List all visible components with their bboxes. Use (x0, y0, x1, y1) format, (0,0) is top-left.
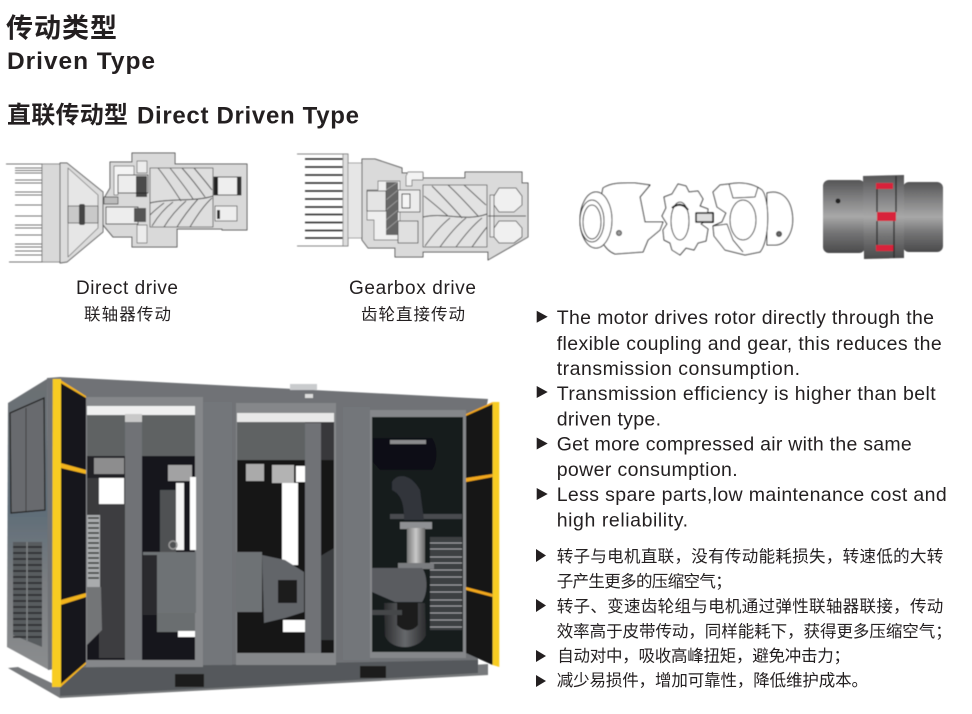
left door (52, 379, 86, 687)
caption: direct drive: 联轴器传动 (84, 305, 171, 324)
section heading: Direct Driven Type: 直联传动型 (7, 102, 128, 129)
bullets: English feature list: The motor drives rotor directly through the (557, 307, 934, 329)
title: English: Driven Type (7, 48, 155, 75)
bullets: Chinese feature list: 转子与电机直联，没有传动能耗损失，转速低的大转 (557, 547, 943, 566)
caption: direct drive: Direct drive (76, 278, 178, 299)
bullets: English feature list: high reliability. (557, 510, 688, 532)
photo: compressor cabinet with open doors (7, 377, 499, 698)
bullets: English feature list: driven type. (557, 409, 661, 431)
bullets: English feature list: flexible coupling and gear, this reduces the (557, 333, 942, 355)
bullets: Chinese feature list: 减少易损件，增加可靠性，降低维护成本。 (557, 671, 868, 690)
diagram: coupling exploded line drawing (580, 183, 793, 255)
section heading: Direct Driven Type: Direct Driven Type (137, 102, 359, 129)
bullets: Chinese feature list: 自动对中，吸收高峰扭矩，避免冲击力； (557, 646, 850, 666)
caption: gearbox drive: 齿轮直接传动 (361, 305, 465, 324)
bullets: Chinese feature list: 转子、变速齿轮组与电机通过弹性联轴器联接，传动 (557, 597, 943, 616)
caption: direct drive (76, 278, 178, 324)
right door (466, 402, 499, 667)
bullets: English feature list: Transmission efficiency is higher than belt (557, 383, 936, 405)
bullets: English feature list: Get more compressed air with the same (557, 434, 912, 456)
bullets: English feature list: power consumption. (557, 459, 738, 481)
bullets: English feature list: transmission consumption. (557, 358, 800, 380)
caption: gearbox drive: Gearbox drive (349, 278, 476, 299)
bullets: Chinese feature list (536, 547, 952, 690)
bullets: Chinese feature list: 子产生更多的压缩空气； (557, 572, 732, 591)
section heading: Direct Driven Type (7, 102, 359, 129)
bullets: English feature list (537, 307, 947, 532)
diagram: direct drive cross-section (6, 153, 247, 263)
bullets: English feature list: Less spare parts,low maintenance cost and (557, 484, 947, 506)
photo: assembled coupling (823, 175, 943, 259)
caption: gearbox drive (349, 278, 476, 324)
diagram: gearbox drive cross-section (297, 154, 528, 260)
bullets: Chinese feature list: 效率高于皮带传动，同样能耗下，获得更多压缩空气； (557, 622, 952, 641)
title: Chinese: 传动类型 (6, 14, 117, 44)
